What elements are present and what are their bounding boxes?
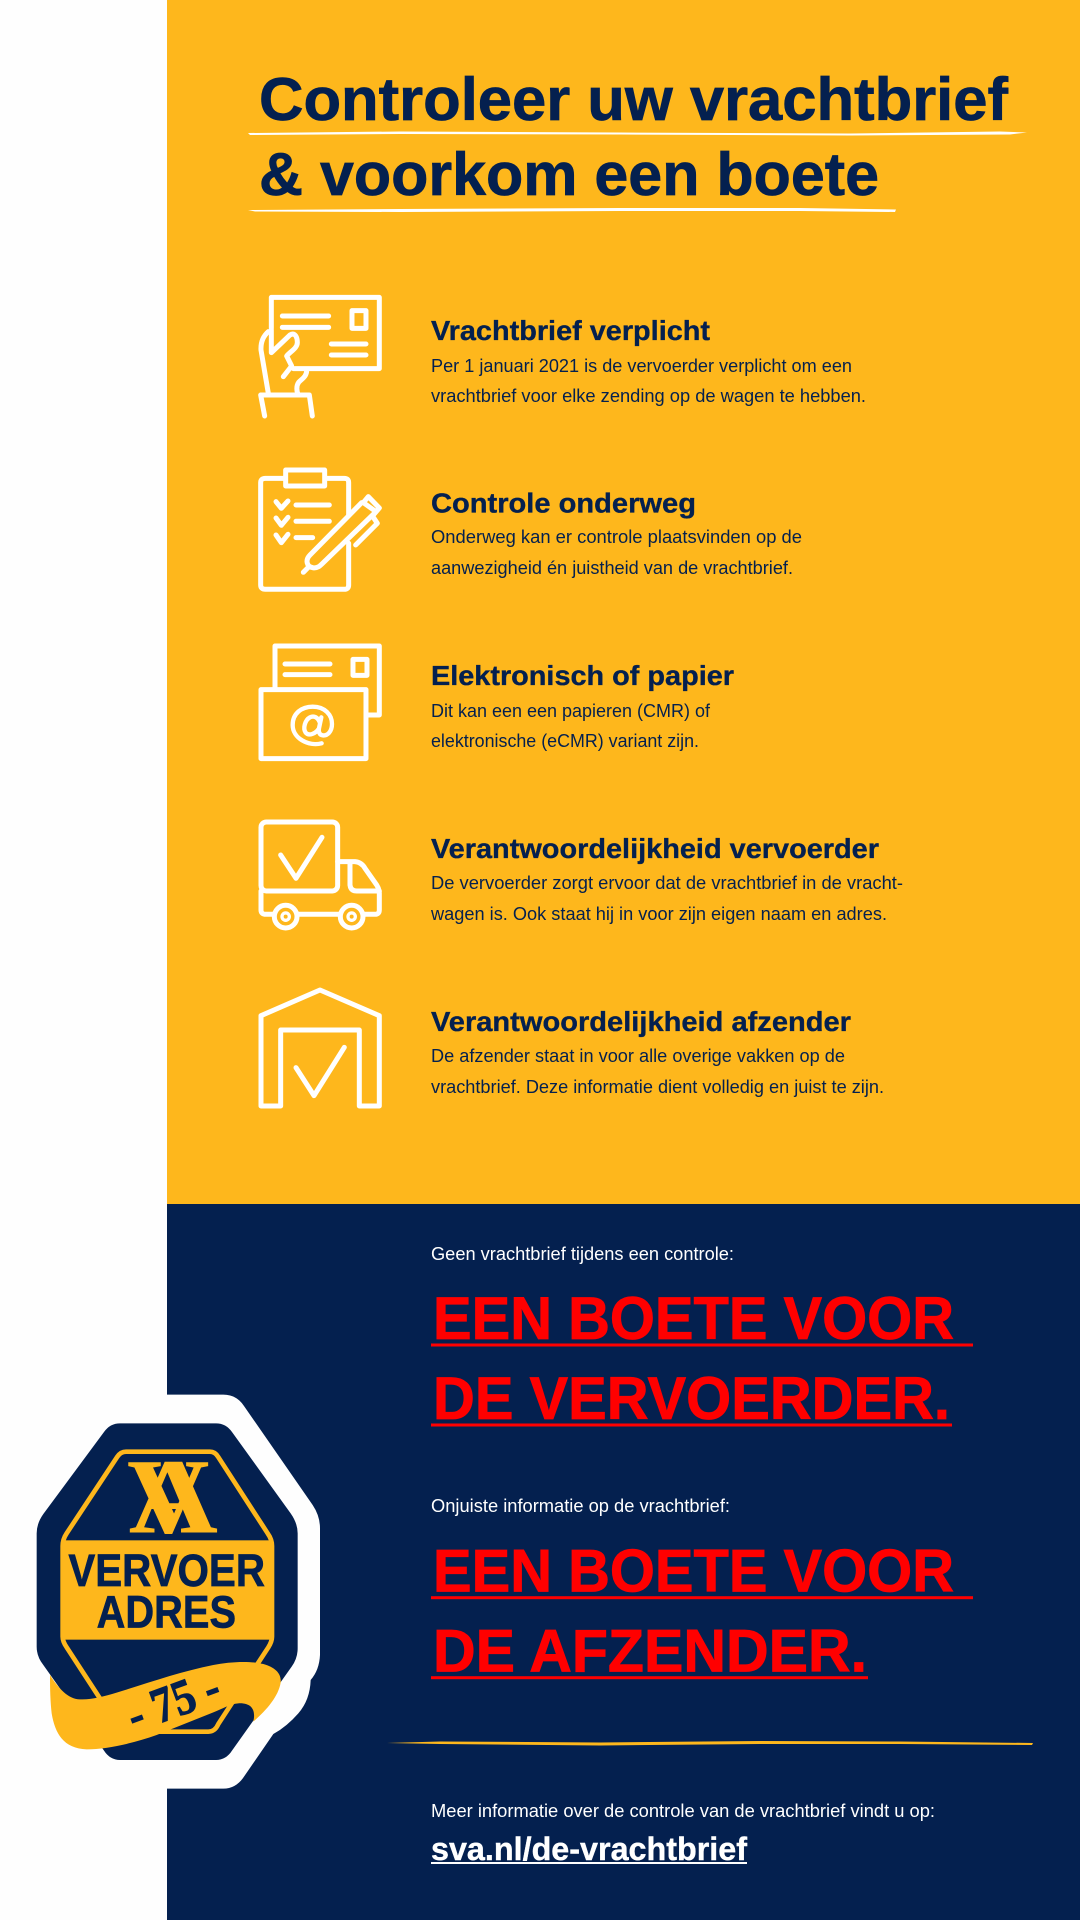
callout: fine for carrier: Geen vrachtbrief tijdens een controle:	[431, 1244, 734, 1264]
text block: verantwoordelijkheid vervoerder: De vervoerder zorgt ervoor dat de vrachtbrief in de vracht-	[431, 873, 903, 893]
text block: vrachtbrief verplicht: Per 1 januari 2021 is de vervoerder verplicht om een	[431, 356, 852, 376]
text block: verantwoordelijkheid vervoerder: wagen is. Ook staat hij in voor zijn eigen naam en adres.	[430, 904, 887, 924]
text block: vrachtbrief verplicht	[431, 315, 866, 406]
icon: clipboard with pen	[261, 470, 379, 589]
text block: verantwoordelijkheid vervoerder	[430, 833, 903, 924]
badge: Vervoer Adres 75 logo: V	[127, 1438, 209, 1556]
icon: hand holding document	[261, 297, 379, 416]
text block: vrachtbrief verplicht: Vrachtbrief verplicht	[431, 315, 710, 346]
text block: verantwoordelijkheid afzender	[431, 1006, 884, 1097]
title: & voorkom een boete	[259, 141, 879, 208]
icon: paper and email document	[261, 646, 379, 759]
text block: controle onderweg	[431, 488, 802, 578]
callout: fine for sender	[431, 1496, 973, 1684]
text block: controle onderweg: Onderweg kan er controle plaatsvinden op de	[431, 527, 802, 547]
text block: elektronisch of papier: Dit kan een een papieren (CMR) of	[431, 701, 711, 721]
badge: Vervoer Adres 75 logo	[37, 1395, 320, 1789]
callout: fine for carrier: EEN BOETE VOOR	[433, 1285, 954, 1352]
text block: verantwoordelijkheid afzender: Verantwoordelijkheid afzender	[431, 1006, 851, 1037]
badge: Vervoer Adres 75 logo: - 75 -	[119, 1658, 227, 1743]
panel: navy fines	[167, 1204, 1080, 1920]
text block: controle onderweg: aanwezigheid én juistheid van de vrachtbrief.	[431, 558, 793, 578]
title: Controleer uw vrachtbrief	[259, 66, 1009, 133]
title	[248, 66, 1027, 212]
badge: Vervoer Adres 75 logo: ADRES	[97, 1587, 236, 1638]
badge: Vervoer Adres 75 logo: A	[129, 1438, 218, 1556]
icon: warehouse with check	[261, 990, 379, 1106]
text block: verantwoordelijkheid afzender: De afzender staat in voor alle overige vakken op de	[431, 1046, 845, 1066]
callout: fine for sender: Onjuiste informatie op de vrachtbrief:	[431, 1496, 730, 1516]
text block: more info link	[431, 1801, 935, 1867]
text block: vrachtbrief verplicht: vrachtbrief voor elke zending op de wagen te hebben.	[431, 386, 866, 406]
badge: Vervoer Adres 75 logo: VERVOER	[68, 1545, 265, 1596]
callout: fine for sender: EEN BOETE VOOR	[433, 1538, 954, 1604]
text block: elektronisch of papier: Elektronisch of papier	[431, 660, 734, 691]
text block: elektronisch of papier	[431, 660, 734, 751]
text block: elektronisch of papier: elektronische (eCMR) variant zijn.	[431, 731, 699, 751]
text block: more info link: sva.nl/de-vrachtbrief	[431, 1831, 747, 1867]
callout: fine for carrier: DE VERVOERDER.	[433, 1365, 950, 1432]
divider: yellow brush line	[387, 1741, 1033, 1746]
text block: controle onderweg: Controle onderweg	[431, 488, 696, 518]
callout: fine for sender: DE AFZENDER.	[433, 1618, 867, 1684]
text block: verantwoordelijkheid vervoerder: Verantwoordelijkheid vervoerder	[431, 833, 879, 864]
panel: yellow checklist	[167, 0, 1080, 1204]
text block: more info link: Meer informatie over de controle van de vrachtbrief vindt u op:	[431, 1801, 935, 1821]
text block: verantwoordelijkheid afzender: vrachtbrief. Deze informatie dient volledig en juist te zijn.	[431, 1077, 884, 1097]
icon: truck with check	[261, 822, 379, 928]
callout: fine for carrier	[431, 1244, 973, 1432]
